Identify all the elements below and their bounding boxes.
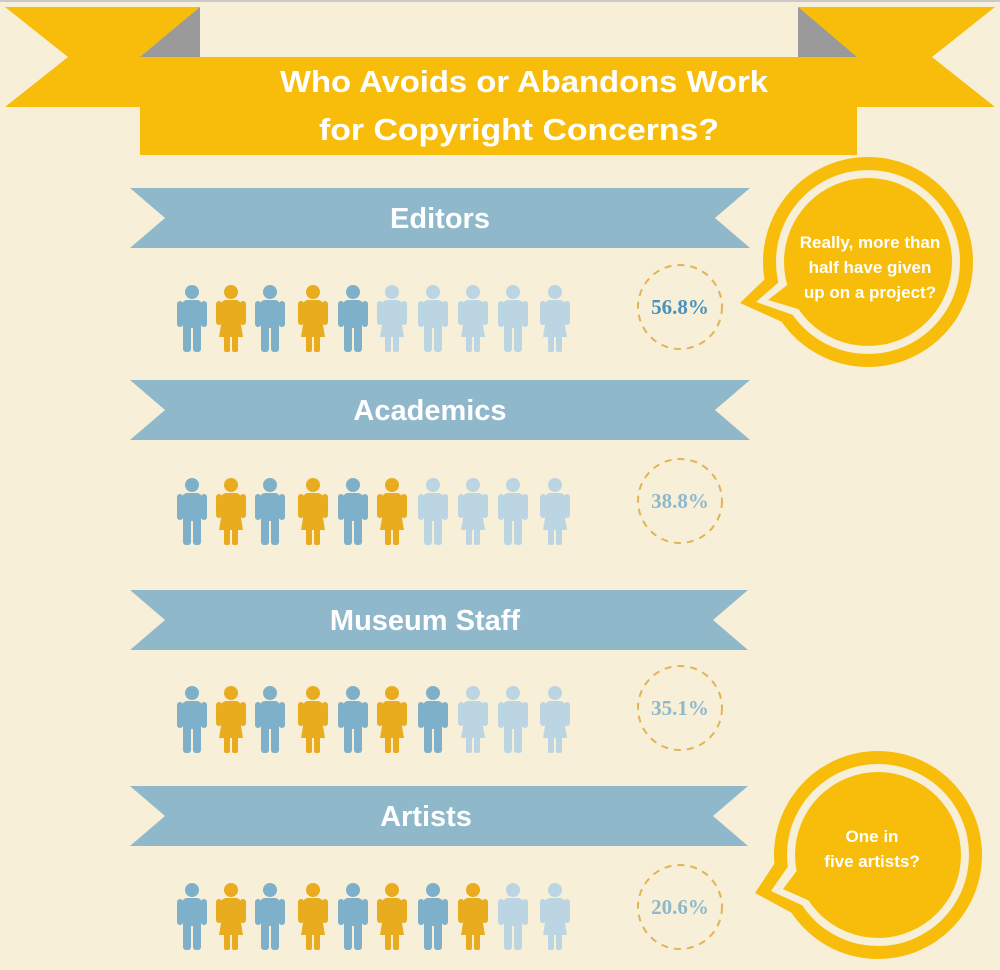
ribbon: Artists: Artists bbox=[380, 801, 472, 833]
title text: Who Avoids or Abandons Work bbox=[280, 64, 769, 99]
callout: artists bubble: five artists? bbox=[824, 852, 920, 871]
callout: editors bubble: Really, more than bbox=[800, 233, 940, 252]
callout: editors bubble: up on a project? bbox=[804, 283, 936, 302]
stat: 56.8% bbox=[638, 265, 722, 349]
stat: 20.6% bbox=[638, 865, 722, 949]
ribbon: Academics bbox=[130, 380, 750, 440]
stat: 38.8%: 38.8% bbox=[651, 489, 709, 513]
stat: 38.8% bbox=[638, 459, 722, 543]
ribbon: Artists bbox=[130, 786, 748, 846]
stat: 20.6%: 20.6% bbox=[651, 895, 709, 919]
title banner bbox=[5, 7, 995, 155]
icons row: Academics bbox=[177, 478, 570, 545]
callout: artists bubble: One in bbox=[846, 827, 898, 846]
callout: editors bubble: half have given bbox=[809, 258, 931, 277]
ribbon: Museum Staff: Museum Staff bbox=[330, 605, 520, 637]
ribbon: Editors bbox=[130, 188, 750, 248]
title text: for Copyright Concerns? bbox=[319, 112, 719, 147]
callout: artists bubble bbox=[755, 751, 982, 959]
ribbon: Academics: Academics bbox=[353, 395, 507, 427]
title text bbox=[280, 64, 769, 147]
icons row: Editors bbox=[177, 285, 570, 352]
callout: editors bubble bbox=[740, 157, 973, 367]
stat: 56.8%: 56.8% bbox=[651, 295, 709, 319]
stat: 35.1% bbox=[638, 666, 722, 750]
stat: 35.1%: 35.1% bbox=[651, 696, 709, 720]
icons row: Museum Staff bbox=[177, 686, 570, 753]
icons row: Artists bbox=[177, 883, 570, 950]
ribbon: Museum Staff bbox=[130, 590, 748, 650]
ribbon: Editors: Editors bbox=[390, 203, 490, 235]
